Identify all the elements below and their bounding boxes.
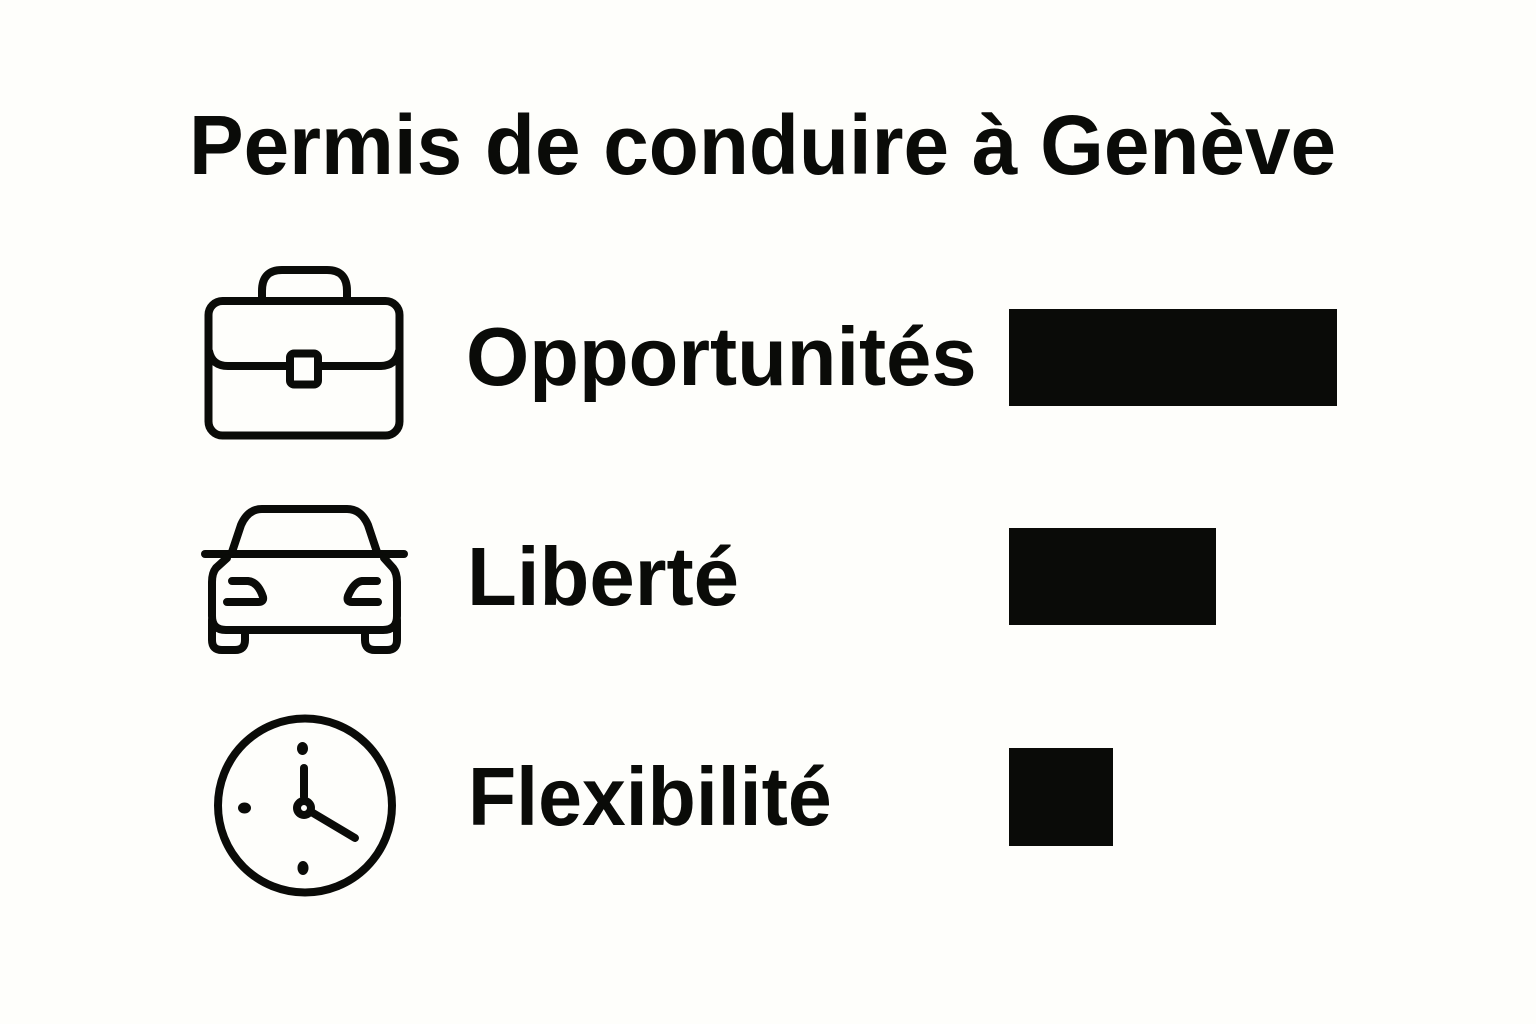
label: Flexibilité: Flexibilité — [468, 750, 832, 843]
bar: Liberté — [1009, 528, 1216, 625]
label: Opportunités: Opportunités — [466, 310, 977, 403]
bar: Opportunités — [1009, 309, 1337, 406]
label: Liberté: Liberté — [467, 530, 739, 623]
title: Permis de conduire à Genève — [189, 98, 1336, 192]
icon: briefcase — [204, 266, 404, 440]
icon: clock — [214, 714, 396, 896]
icon: car — [201, 505, 408, 654]
bar: Flexibilité — [1009, 748, 1113, 846]
